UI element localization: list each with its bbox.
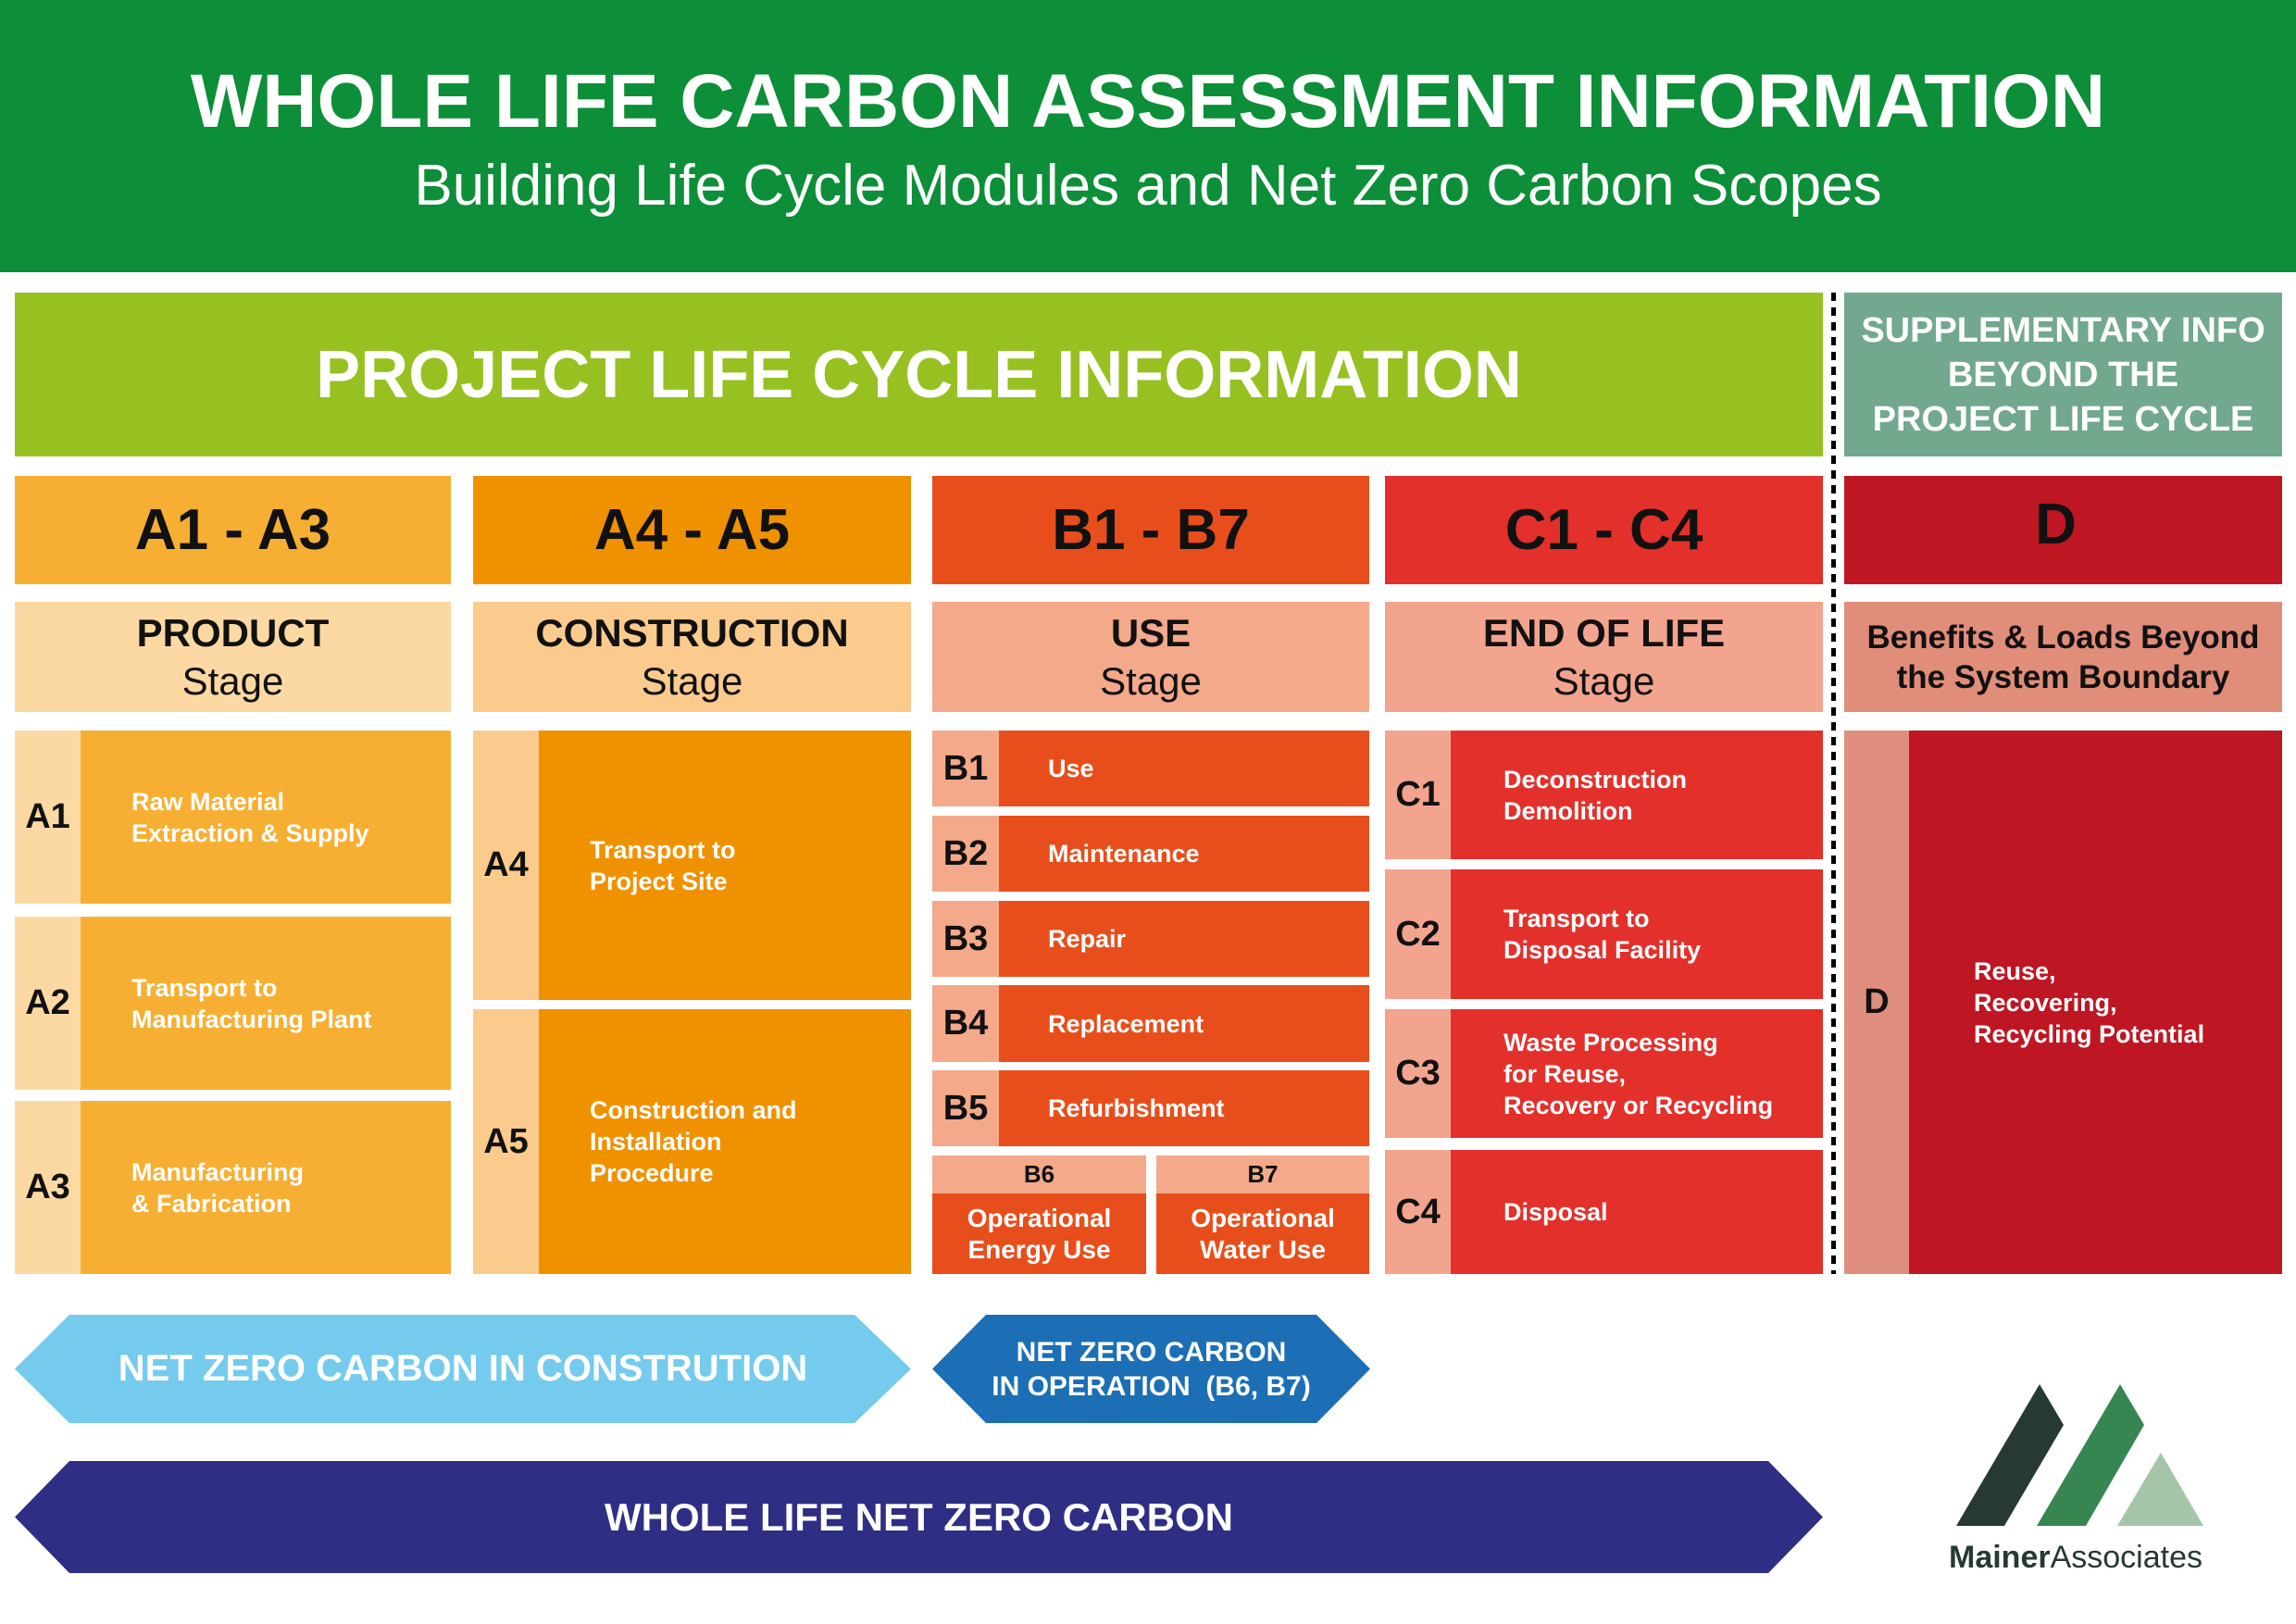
module C3: [1385, 1009, 1823, 1138]
module B5: B5: [943, 1089, 988, 1128]
arrow: net zero carbon in construction: NET ZERO CARBON IN CONSTRUTION: [119, 1348, 807, 1389]
logo: Mainer Associates: MainerAssociates: [1949, 1540, 2202, 1575]
module C1: [1385, 731, 1823, 859]
module B7: Operational: [1191, 1204, 1335, 1231]
header A4-A5: A4 - A5: [594, 498, 790, 562]
header A1-A3: [15, 476, 451, 584]
module C4: [1385, 1150, 1823, 1274]
module B4: [932, 985, 1369, 1062]
module C2: Disposal Facility: [1504, 936, 1701, 964]
module B1: Use: [1048, 755, 1094, 782]
product stage: PRODUCT: [137, 611, 329, 654]
module B2: B2: [943, 833, 988, 872]
module A4: [473, 731, 911, 1000]
module A4: Project Site: [590, 867, 728, 894]
arrow: net zero carbon in operation: NET ZERO CARBON: [1017, 1337, 1286, 1367]
title: WHOLE LIFE CARBON ASSESSMENT INFORMATION: [191, 59, 2105, 144]
module D: Reuse,: [1974, 957, 2056, 985]
module C3: Recovery or Recycling: [1504, 1091, 1773, 1118]
module A3: A3: [25, 1168, 70, 1206]
header A4-A5: [473, 476, 911, 584]
module B3: [932, 901, 1369, 977]
product stage: Stage: [182, 659, 283, 702]
arrow: net zero carbon in construction: [15, 1315, 911, 1423]
header B1-B7: [932, 476, 1369, 584]
module A1: [15, 731, 451, 904]
module C3: Waste Processing: [1504, 1028, 1718, 1056]
header D background: [1844, 476, 2282, 584]
header C1-C4: C1 - C4: [1505, 498, 1703, 562]
module C3: C3: [1395, 1054, 1441, 1093]
header banner: [0, 0, 2296, 272]
module B2: Maintenance: [1048, 840, 1200, 868]
module A4: Transport to: [590, 835, 736, 863]
benefits stage: the System Boundary: [1897, 659, 2229, 694]
module C4: C4: [1395, 1193, 1441, 1231]
module B7: Water Use: [1200, 1235, 1326, 1263]
module A2: Manufacturing Plant: [131, 1006, 372, 1033]
construction stage: CONSTRUCTION: [535, 611, 849, 654]
module C1: C1: [1395, 775, 1441, 814]
module B6: Energy Use: [967, 1235, 1111, 1263]
module B1: B1: [943, 748, 988, 787]
benefits stage: [1844, 602, 2282, 712]
module A1: Extraction & Supply: [131, 818, 369, 846]
module B2: [932, 816, 1369, 892]
module A5: Procedure: [590, 1159, 714, 1187]
module B5: [932, 1070, 1369, 1146]
benefits stage: Benefits & Loads Beyond: [1867, 618, 2259, 656]
module A1: Raw Material: [131, 787, 284, 815]
supplementary info banner: BEYOND THE: [1948, 356, 2178, 394]
header B1-B7: B1 - B7: [1052, 498, 1250, 562]
arrow: whole life net zero carbon: [15, 1461, 1823, 1573]
module B3: Repair: [1048, 925, 1126, 953]
logo: Mainer Associates: [1949, 1384, 2203, 1575]
module B7: B7: [1247, 1160, 1279, 1188]
header D: D: [2035, 493, 2077, 556]
module D: [1844, 731, 2282, 1274]
column C1-C4: [1385, 476, 1823, 1274]
module A5: Installation: [590, 1128, 722, 1156]
header C1-C4: [1385, 476, 1823, 584]
end of life stage: END OF LIFE: [1483, 611, 1725, 654]
module B7: [1156, 1156, 1369, 1274]
module C2: C2: [1395, 915, 1441, 954]
module B1: [932, 731, 1369, 806]
module C1: Deconstruction: [1504, 765, 1687, 793]
module A5: Construction and: [590, 1096, 796, 1124]
column B1-B7: [932, 476, 1369, 1274]
product stage: [15, 602, 451, 712]
module B6: B6: [1024, 1160, 1054, 1188]
module D: D: [1864, 982, 1890, 1021]
subtitle: Building Life Cycle Modules and Net Zero Carbon Scopes: [414, 154, 1882, 217]
module C2: Transport to: [1504, 905, 1650, 932]
module A4: A4: [483, 845, 529, 884]
module A3: Manufacturing: [131, 1157, 304, 1185]
arrow: net zero carbon in operation: IN OPERATION (B6, B7): [992, 1370, 1311, 1402]
module B6: [932, 1156, 1146, 1274]
module A3: & Fabrication: [131, 1189, 292, 1217]
module B3: B3: [943, 918, 988, 957]
module C2: [1385, 869, 1823, 999]
module A5: A5: [483, 1122, 529, 1161]
divider dotted line: [1831, 293, 1836, 1274]
end of life stage: [1385, 602, 1823, 712]
use stage: Stage: [1100, 659, 1202, 702]
header A1-A3: A1 - A3: [135, 498, 331, 562]
module A2: [15, 917, 451, 1090]
construction stage: [473, 602, 911, 712]
use stage: USE: [1111, 611, 1191, 654]
module A5: [473, 1009, 911, 1274]
column D: [1844, 493, 2282, 1274]
module A2: Transport to: [131, 974, 278, 1002]
module C3: for Reuse,: [1504, 1059, 1626, 1087]
module C4: Disposal: [1504, 1198, 1608, 1226]
column A1-A3: [15, 476, 451, 1274]
module B6: Operational: [967, 1204, 1111, 1231]
module B4: Replacement: [1048, 1009, 1204, 1037]
column A4-A5: [473, 476, 911, 1274]
module B4: B4: [943, 1004, 988, 1043]
supplementary info banner: SUPPLEMENTARY INFO: [1861, 311, 2265, 350]
module B5: Refurbishment: [1048, 1094, 1225, 1122]
module A3: [15, 1101, 451, 1274]
module A1: A1: [25, 797, 70, 836]
module C1: Demolition: [1504, 796, 1633, 824]
module D: Recovering,: [1974, 989, 2117, 1017]
use stage: [932, 602, 1369, 712]
arrow: net zero carbon in operation: [932, 1315, 1370, 1423]
project life cycle banner: [15, 293, 1823, 456]
project life cycle banner: PROJECT LIFE CYCLE INFORMATION: [316, 337, 1522, 411]
end of life stage: Stage: [1554, 659, 1654, 702]
module D: Recycling Potential: [1974, 1020, 2204, 1048]
construction stage: Stage: [642, 659, 742, 702]
supplementary info banner: [1844, 293, 2282, 456]
supplementary info banner: PROJECT LIFE CYCLE: [1873, 400, 2253, 439]
module A2: A2: [25, 983, 70, 1022]
arrow: whole life net zero carbon: WHOLE LIFE NET ZERO CARBON: [605, 1494, 1233, 1539]
